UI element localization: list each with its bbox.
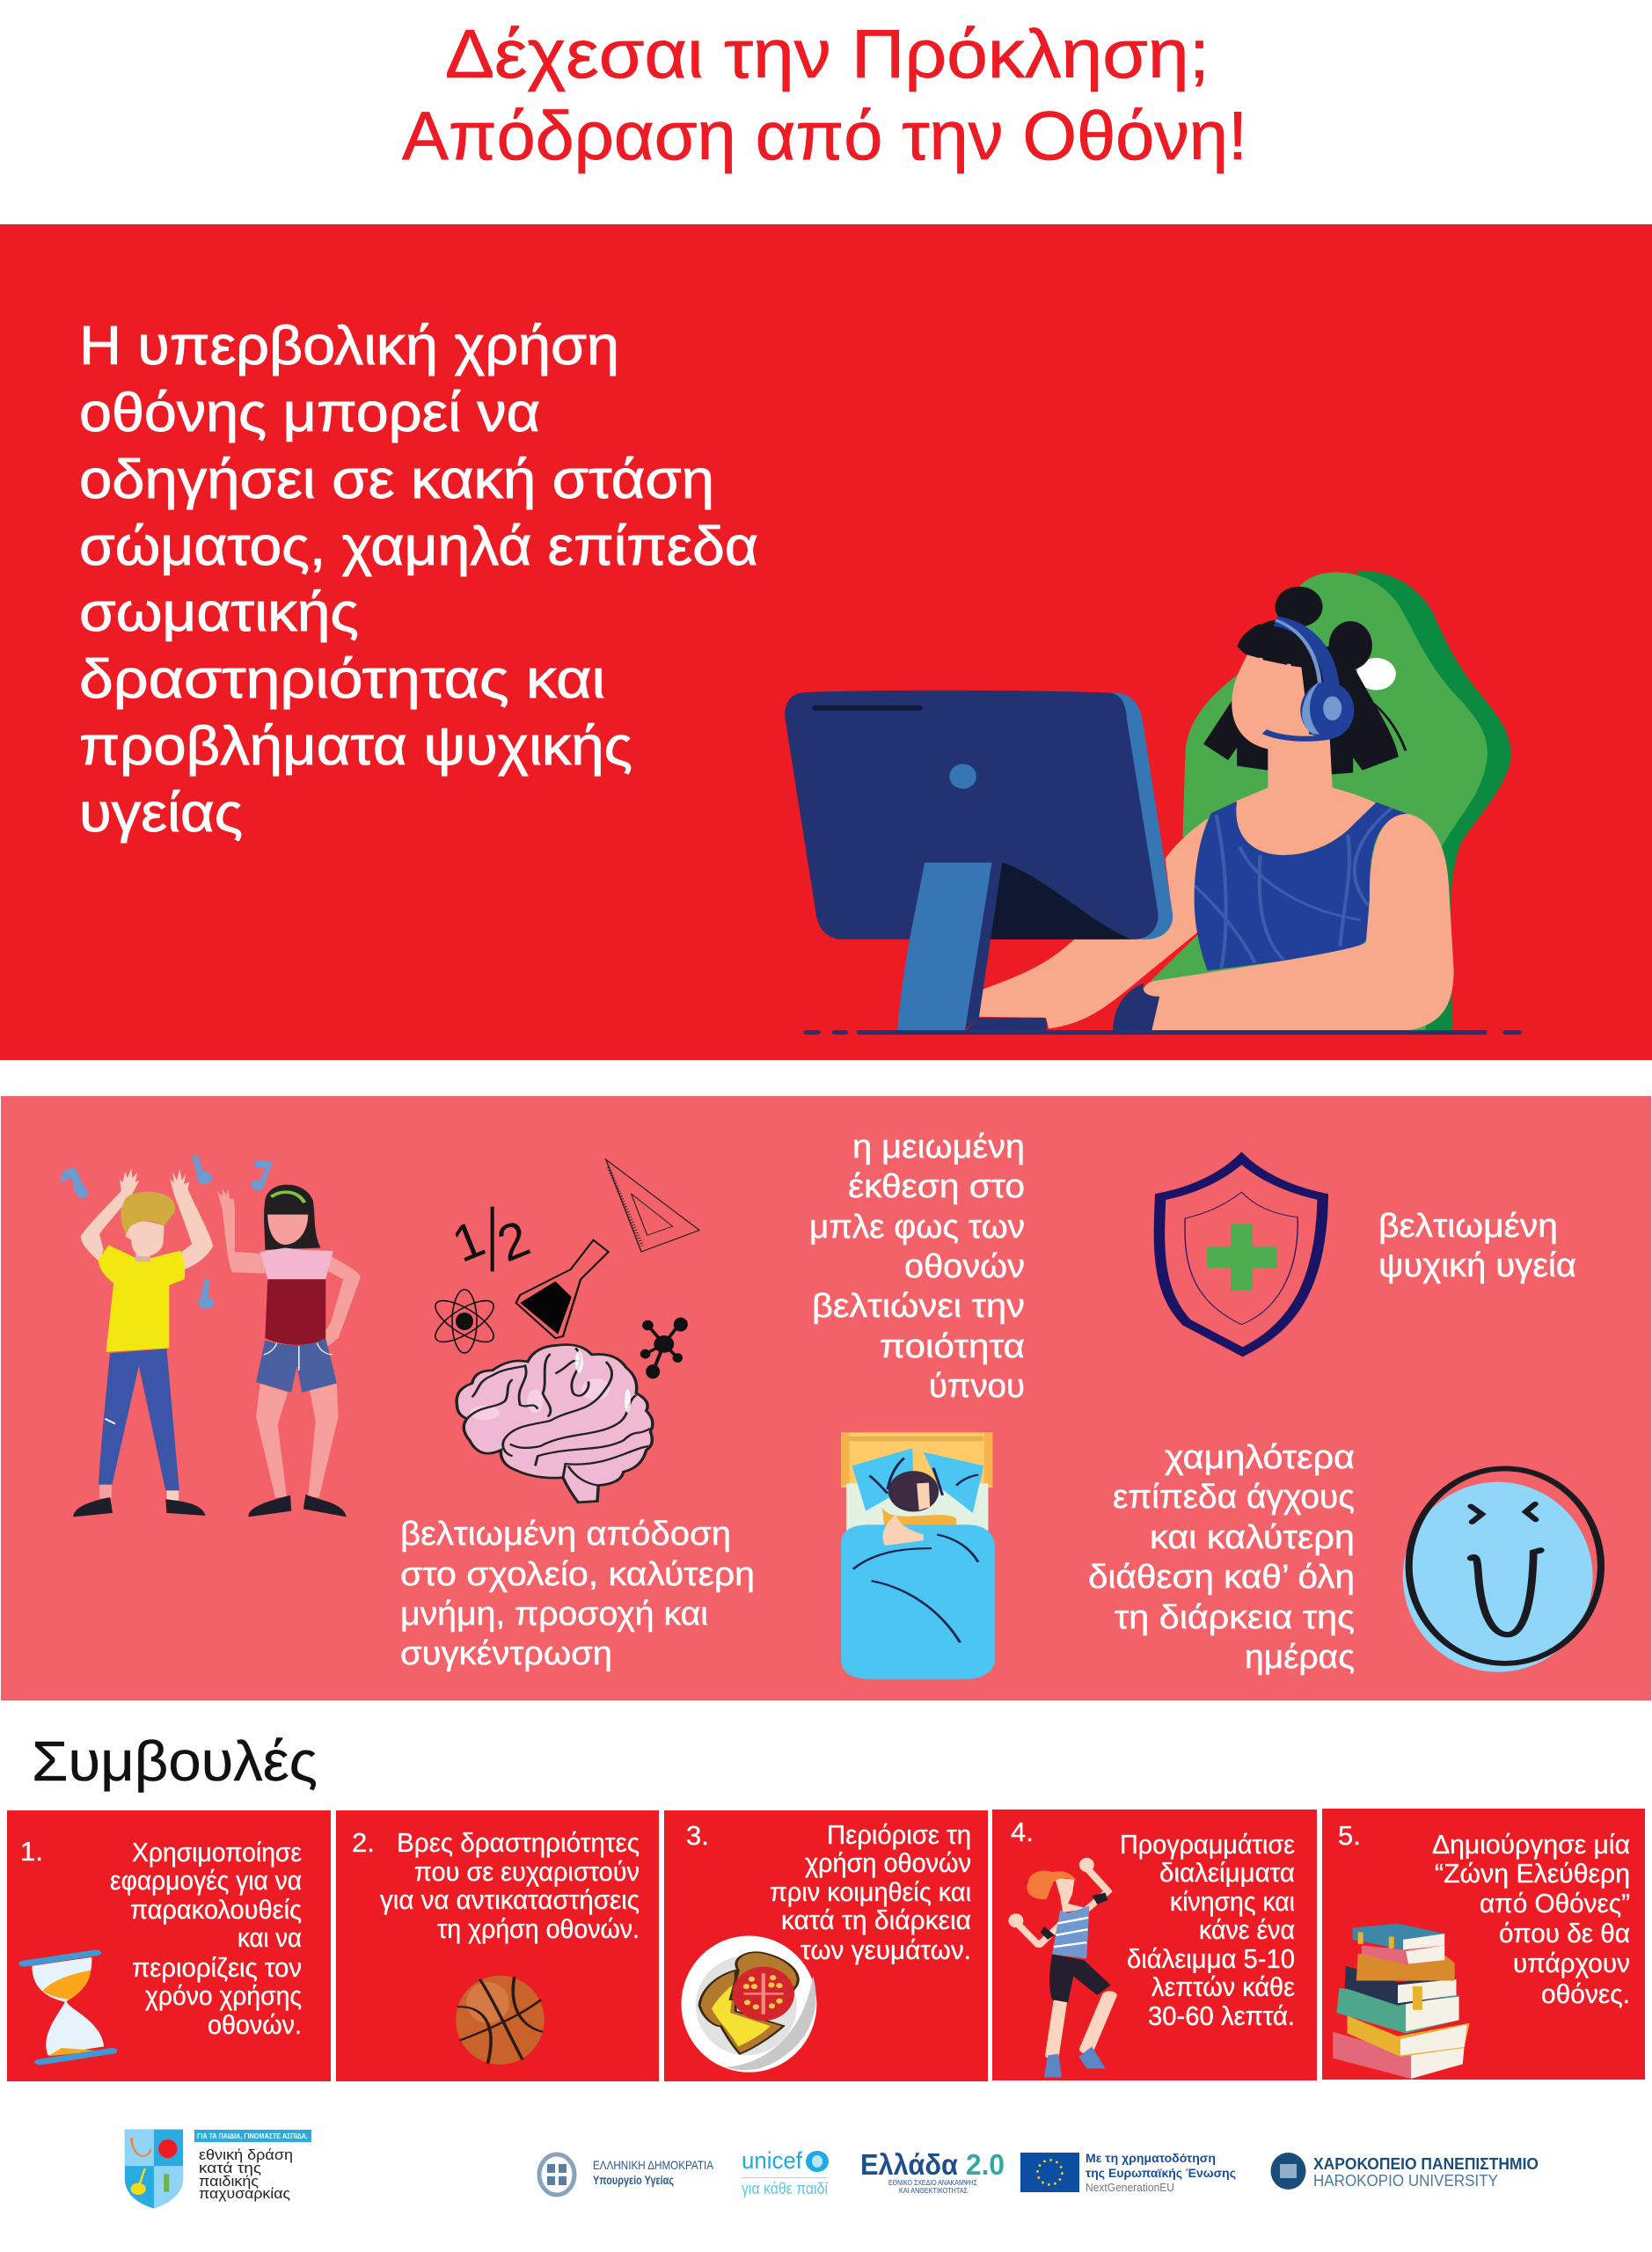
- text block: mental health: [1378, 1208, 1576, 1284]
- text block: blue light and sleep: έκθεση στο: [848, 1168, 1025, 1205]
- icon: shield with cross: [1159, 1159, 1323, 1352]
- panel: tip 5: [1322, 1809, 1645, 2080]
- logo: unicef: [742, 2147, 829, 2197]
- tip text 2: [380, 1827, 640, 1944]
- logo: Harokopio University: [1270, 2153, 1539, 2190]
- logo: Hellenic Republic Ministry of Health: ΕΛΛΗΝΙΚΗ ΔΗΜΟΚΡΑΤΙΑ: [593, 2158, 714, 2172]
- tip text 4: Προγραμμάτισε: [1120, 1829, 1295, 1860]
- panel: tip 4: [992, 1810, 1317, 2080]
- tip text 5: υπάρχουν: [1513, 1948, 1630, 1978]
- tip text 4: [1120, 1829, 1295, 2031]
- tip text 3: χρήση οθονών: [805, 1847, 971, 1878]
- tip text 4: διάλειμμα 5-10: [1127, 1943, 1295, 1974]
- logo: national action against childhood obesity: παχυσαρκίας: [199, 2185, 290, 2202]
- title: [402, 15, 1247, 174]
- tip text 5: [1432, 1829, 1630, 2009]
- logo: Hellenic Republic Ministry of Health: [539, 2154, 714, 2195]
- icon: shield logo: [125, 2130, 183, 2209]
- tip text 1: παρακολουθείς: [130, 1894, 302, 1925]
- text block: blue light and sleep: [809, 1129, 1025, 1405]
- logo: national action against childhood obesity: εθνική δράση: [199, 2146, 293, 2163]
- tip number 5: 5.: [1338, 1820, 1361, 1851]
- tip text 5: όπου δε θα: [1499, 1918, 1630, 1949]
- logo: Greece 2.0: 2.0: [966, 2148, 1005, 2181]
- tip text 1: [110, 1837, 302, 2040]
- panel: screen overuse warning: [0, 224, 1652, 1060]
- tip number 3: 3.: [686, 1820, 709, 1851]
- icon: basketball: [456, 1976, 545, 2065]
- title: Δέχεσαι την Πρόκληση;: [445, 15, 1210, 92]
- text block: lower stress: διάθεση καθ’ όλη: [1088, 1559, 1355, 1596]
- icon: plate with toast: [681, 1936, 816, 2073]
- text block: screen overuse consequences: δραστηριότητας και: [79, 649, 605, 710]
- illustration: exercising woman: [1008, 1858, 1111, 2077]
- panel: tip 2: [336, 1810, 659, 2081]
- tip text 3: κατά τη διάρκεια: [781, 1905, 971, 1935]
- icon: hourglass: [24, 1953, 112, 2062]
- logo: European Union funding: [1020, 2151, 1236, 2194]
- text block: screen overuse consequences: Η υπερβολική χρήση: [79, 316, 619, 377]
- text block: mental health: ψυχική υγεία: [1378, 1247, 1576, 1284]
- logo: Greece 2.0: ΚΑΙ ΑΝΘΕΚΤΙΚΟΤΗΤΑΣ: [899, 2187, 968, 2195]
- text block: blue light and sleep: μπλε φως των: [809, 1209, 1025, 1246]
- text block: school performance: βελτιωμένη απόδοση: [400, 1516, 731, 1553]
- text block: blue light and sleep: ποιότητα: [880, 1328, 1025, 1365]
- text block: lower stress: τη διάρκεια της: [1115, 1599, 1355, 1636]
- tip text 3: [770, 1819, 971, 1965]
- logo: Greece 2.0: [860, 2148, 1005, 2195]
- tip text 3: των γευμάτων.: [800, 1934, 971, 1965]
- text block: blue light and sleep: οθονών: [904, 1248, 1025, 1285]
- tip text 2: που σε ευχαριστούν: [414, 1856, 640, 1887]
- tip text 3: πριν κοιμηθείς και: [770, 1876, 971, 1907]
- tip text 4: 30-60 λεπτά.: [1148, 2000, 1295, 2031]
- text block: school performance: μνήμη, προσοχή και: [400, 1596, 708, 1633]
- tip text 1: περιορίζεις τον: [132, 1952, 302, 1983]
- tip text 1: οθονών.: [208, 2009, 302, 2040]
- tip text 4: λεπτών κάθε: [1151, 1971, 1295, 2002]
- tip text 3: Περιόρισε τη: [827, 1819, 971, 1850]
- text block: blue light and sleep: ύπνου: [929, 1368, 1025, 1405]
- logo: national action against childhood obesity: κατά της: [199, 2160, 261, 2176]
- logo: national action against childhood obesity: [125, 2130, 311, 2209]
- tip text 1: χρόνο χρήσης: [145, 1980, 302, 2011]
- icon: science symbols and brain: 2: [490, 1210, 537, 1273]
- tip text 4: διαλείμματα: [1159, 1857, 1295, 1888]
- logo: Harokopio University: ΧΑΡΟΚΟΠΕΙΟ ΠΑΝΕΠΙΣΤΗΜΙΟ: [1313, 2155, 1539, 2173]
- tip text 5: Δημιούργησε μία: [1432, 1829, 1630, 1860]
- tip number 4: 4.: [1011, 1817, 1034, 1847]
- icon: smiling face: [1403, 1468, 1601, 1672]
- text block: screen overuse consequences: οδηγήσει σε κακή στάση: [79, 450, 714, 510]
- text block: lower stress: χαμηλότερα: [1165, 1439, 1355, 1476]
- text block: screen overuse consequences: σωματικής: [79, 582, 359, 643]
- panel: tip 1: [7, 1810, 331, 2081]
- tip text 2: για να αντικαταστήσεις: [380, 1884, 640, 1915]
- icon: science symbols and brain: 1: [444, 1210, 493, 1274]
- logo: unicef: για κάθε παιδί: [742, 2180, 828, 2197]
- illustration: dancing children: [61, 1156, 361, 1517]
- tip text 5: “Ζώνη Ελεύθερη: [1435, 1858, 1630, 1889]
- logo: national action against childhood obesity: παιδικής: [199, 2173, 259, 2190]
- text block: screen overuse consequences: [79, 316, 758, 844]
- tip text 4: κίνησης και: [1170, 1886, 1295, 1917]
- text block: lower stress: επίπεδα άγχους: [1113, 1479, 1355, 1516]
- logo: unicef: unicef: [742, 2147, 802, 2174]
- text block: school performance: [400, 1516, 755, 1672]
- logo: Greece 2.0: Ελλάδα: [860, 2148, 958, 2181]
- text block: mental health: βελτιωμένη: [1378, 1208, 1558, 1245]
- logo: European Union funding: Με τη χρηματοδότηση: [1085, 2151, 1216, 2165]
- tip text 4: κάνε ένα: [1199, 1914, 1295, 1945]
- tip text 5: οθόνες.: [1541, 1978, 1630, 2009]
- logo: Hellenic Republic Ministry of Health: Υπουργείο Υγείας: [593, 2173, 674, 2187]
- logo: European Union funding: της Ευρωπαϊκής Ένωσης: [1085, 2166, 1236, 2180]
- tip text 2: Βρες δραστηριότητες: [397, 1827, 640, 1858]
- text block: lower stress: και καλύτερη: [1150, 1519, 1355, 1556]
- icon: stack of books: [1333, 1924, 1470, 2079]
- logo: Greece 2.0: ΕΘΝΙΚΟ ΣΧΕΔΙΟ ΑΝΑΚΑΜΨΗΣ: [888, 2179, 977, 2187]
- logo: Harokopio University: HAROKOPIO UNIVERSITY: [1313, 2172, 1498, 2190]
- logo: national action against childhood obesity: ΓΙΑ ΤΑ ΠΑΙΔΙΑ, ΓΙΝΟΜΑΣΤΕ ΑΣΠΙΔΑ.: [197, 2132, 308, 2140]
- text block: blue light and sleep: η μειωμένη: [852, 1129, 1025, 1166]
- tip text 2: τη χρήση οθονών.: [437, 1913, 640, 1944]
- tip number 2: 2.: [352, 1827, 375, 1858]
- text block: screen overuse consequences: προβλήματα ψυχικής: [79, 716, 632, 777]
- panel: benefits: [1, 1096, 1651, 1700]
- illustration: girl with headset at computer: [785, 571, 1522, 1035]
- text block: school performance: συγκέντρωση: [400, 1635, 612, 1672]
- text block: screen overuse consequences: σώματος, χαμηλά επίπεδα: [79, 516, 758, 577]
- text block: lower stress: [1088, 1439, 1355, 1676]
- text block: lower stress: ημέρας: [1245, 1639, 1355, 1676]
- text block: blue light and sleep: βελτιώνει την: [812, 1288, 1025, 1325]
- icon: girl sleeping in bed: [841, 1432, 995, 1679]
- tip number 1: 1.: [20, 1836, 43, 1867]
- logo: European Union funding: NextGenerationEU: [1085, 2181, 1174, 2194]
- tip text 1: εφαρμογές για να: [110, 1865, 302, 1896]
- panel: tip 3: [664, 1810, 988, 2081]
- heading: tips: Συμβουλές: [32, 1729, 318, 1793]
- title: Απόδραση από την Οθόνη!: [402, 97, 1247, 174]
- text block: screen overuse consequences: υγείας: [79, 783, 243, 844]
- tip text 1: Χρησιμοποίησε: [132, 1837, 302, 1868]
- tip text 1: και να: [238, 1922, 302, 1953]
- icon: science symbols and brain: [429, 1159, 699, 1503]
- tip text 5: από Οθόνες”: [1480, 1888, 1630, 1919]
- text block: screen overuse consequences: οθόνης μπορεί να: [79, 383, 540, 443]
- text block: school performance: στο σχολείο, καλύτερη: [400, 1556, 755, 1593]
